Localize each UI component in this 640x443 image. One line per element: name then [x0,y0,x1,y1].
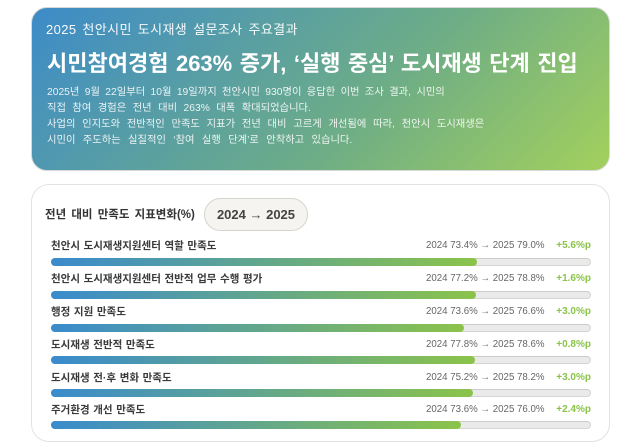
indicator row: overall work evaluation: 천안시 도시재생지원센터 전반적 업무 수행 평가 [51,273,262,285]
indicator row: before and after change: 2024 75.2% → 2025 78.2% [426,372,544,383]
indicator row: role satisfaction: 2024 73.4% → 2025 79.0% [426,240,544,250]
panel: summary banner [31,7,610,171]
summary text: 시민이 주도하는 실질적인 ‘참여 실행 단계’로 안착하고 있습니다. [47,135,352,146]
indicator row: living environment: +2.4%p [556,404,591,415]
indicator row: administrative support: +3.0%p [556,306,591,317]
indicator row: overall regeneration: 도시재생 전반적 만족도 [51,339,155,351]
panel: satisfaction indicators [31,184,610,442]
year range badge: 2024 → 2025 [217,207,295,222]
year range badge [204,198,308,231]
indicator row: administrative support: 행정 지원 만족도 [51,306,126,318]
indicator row: role satisfaction: +5.6%p [556,240,591,250]
indicator row: administrative support: 2024 73.6% → 2025 76.6% [426,306,544,317]
indicator row: before and after change: 도시재생 전·후 변화 만족도 [51,372,172,384]
indicator row: before and after change [51,372,591,397]
chart heading: 전년 대비 만족도 지표변화(%) [45,209,195,221]
indicator row: role satisfaction [51,240,591,266]
indicator row: administrative support [51,306,591,332]
summary text [47,86,484,146]
indicator row: overall work evaluation [51,273,591,299]
indicator row: overall work evaluation: 2024 77.2% → 2025 78.8% [426,273,544,284]
indicator row: overall regeneration: +0.8%p [556,339,591,350]
indicator row: before and after change: +3.0%p [556,372,591,383]
eyebrow heading: 2025 천안시민 도시재생 설문조사 주요결과 [46,22,298,37]
indicator row: living environment: 2024 73.6% → 2025 76.0% [426,404,544,415]
summary text: 2025년 9월 22일부터 10월 19일까지 천안시민 930명이 응답한 이번 조사 결과, 시민의 [47,86,445,98]
summary text: 직접 참여 경험은 전년 대비 263% 대폭 확대되었습니다. [47,103,311,114]
summary text: 사업의 인지도와 전반적인 만족도 지표가 전년 대비 고르게 개선됨에 따라, 천안시 도시재생은 [47,119,484,130]
indicator row: role satisfaction: 천안시 도시재생지원센터 역할 만족도 [51,240,216,252]
indicator row: living environment: 주거환경 개선 만족도 [51,404,145,416]
main title: 시민참여경험 263% 증가, ‘실행 중심’ 도시재생 단계 진입 [47,51,578,76]
indicator row: overall regeneration: 2024 77.8% → 2025 78.6% [426,339,544,350]
indicator row: living environment [51,404,591,429]
indicator row: overall work evaluation: +1.6%p [556,273,591,284]
indicator row: overall regeneration [51,339,591,364]
